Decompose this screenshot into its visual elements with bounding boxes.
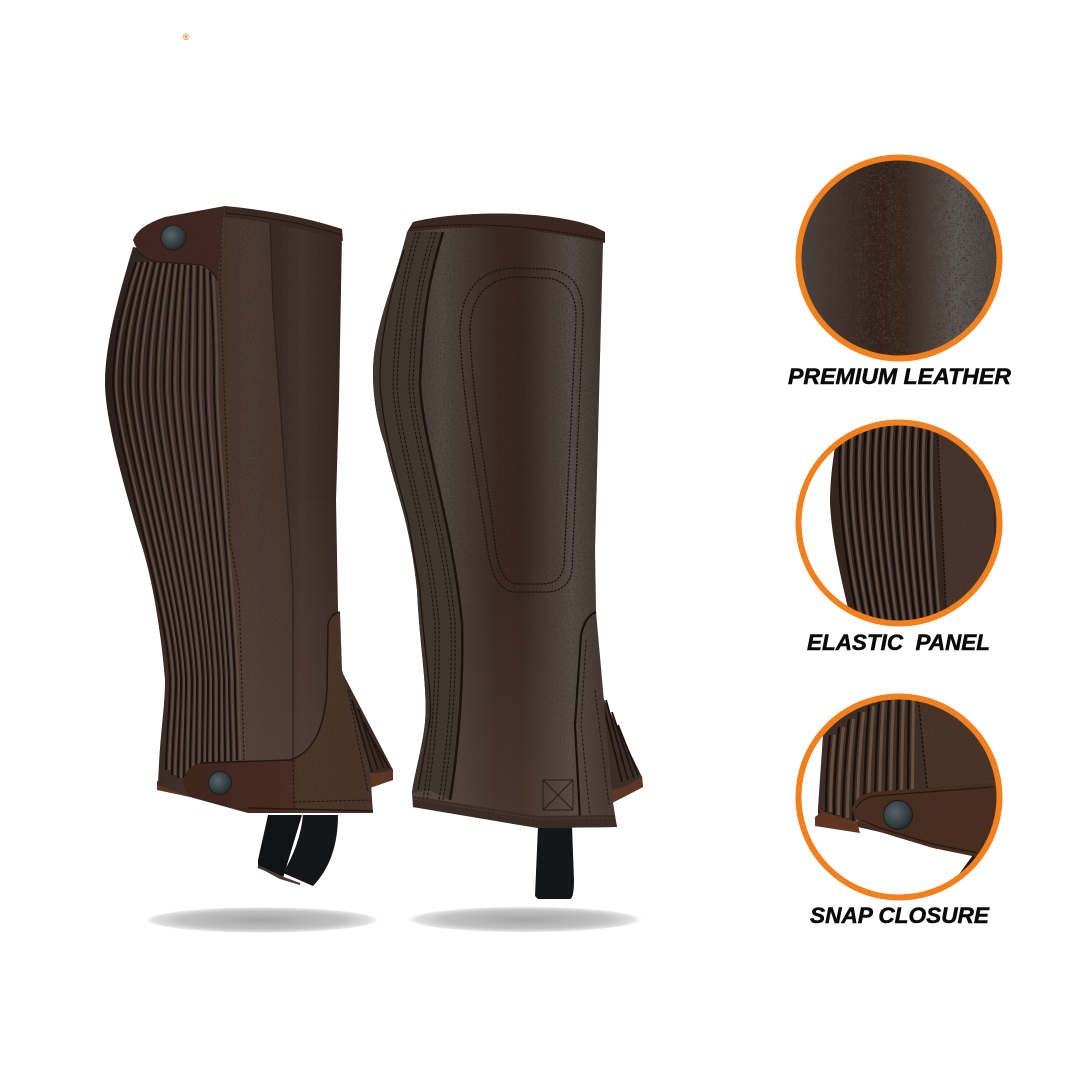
leather front strip: [218, 206, 342, 762]
callout: premium leather: [788, 155, 1012, 389]
cross-stitched box: [543, 780, 573, 810]
leather close-up: [802, 160, 996, 356]
snap button: [884, 800, 912, 830]
right chap: [373, 214, 643, 899]
label: PREMIUM LEATHER: [788, 364, 1012, 389]
orange ring: [798, 422, 1000, 624]
heel tab stitching: [581, 640, 609, 815]
rear flare: [597, 685, 643, 803]
elastic panel: [105, 247, 245, 797]
callout: elastic panel: [795, 420, 1005, 655]
seam lines: [270, 223, 293, 760]
label: SNAP CLOSURE: [810, 903, 990, 928]
heel seam: [575, 612, 596, 818]
shadow: left chap: [144, 907, 380, 933]
top binding: [224, 206, 343, 241]
top binding: [407, 214, 605, 243]
shadow: right chap: [407, 906, 643, 932]
orange ring: [798, 696, 1000, 898]
left chap: [105, 206, 393, 886]
lower lightening: [228, 500, 338, 762]
callout: snap closure: [795, 694, 1005, 928]
snap button: [208, 772, 232, 794]
stirrup strap: right chap: [535, 826, 574, 899]
brand mark: ®: [183, 32, 190, 42]
chap body: [373, 222, 617, 828]
orange ring: [798, 158, 1000, 358]
snap button: [161, 225, 186, 250]
label: ELASTIC PANEL: [807, 630, 990, 655]
elastic close-up: [830, 426, 996, 620]
knee patch stitching: [460, 268, 583, 592]
snap close-up: [815, 700, 996, 874]
snap strap: [852, 783, 1005, 857]
top tab with snap: [133, 206, 225, 281]
side stitching: [380, 232, 462, 800]
rear flare: [157, 668, 393, 797]
bottom binding: [413, 796, 617, 828]
stirrup strap: left chap: [258, 815, 338, 886]
lower tab and flare: [183, 612, 373, 813]
